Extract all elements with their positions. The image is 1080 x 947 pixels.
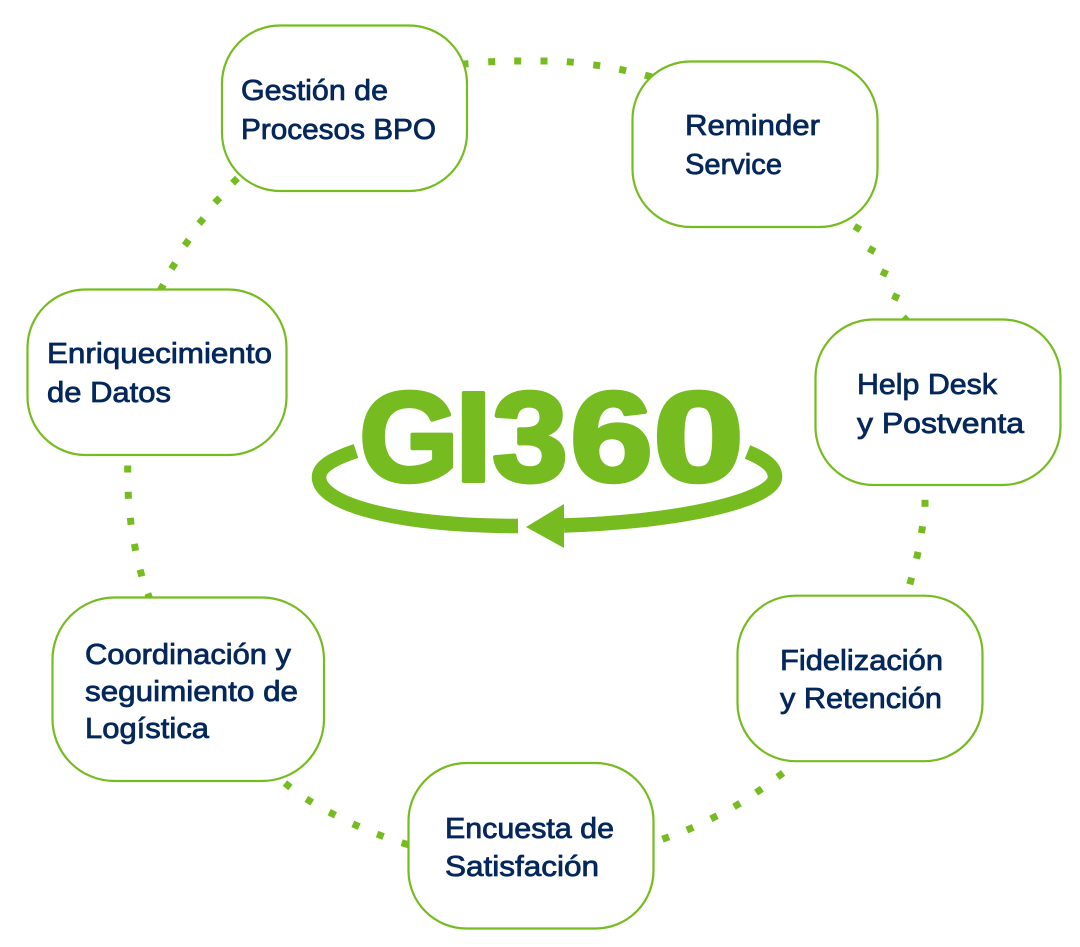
panel: Encuesta de Satisfación: Encuesta de [445, 813, 614, 845]
panel: Coordinación y seguimiento de Logística: seguimiento de [85, 676, 298, 708]
panel: Enriquecimiento de Datos: de Datos [47, 377, 171, 409]
panel: Encuesta de Satisfación [408, 763, 654, 928]
logo wordmark: 6 [570, 366, 653, 509]
logo wordmark: I [455, 366, 492, 509]
panel: Help Desk y Postventa [816, 320, 1060, 485]
logo wordmark: 0 [653, 366, 744, 509]
panel: Gestión de Procesos BPO [222, 26, 467, 191]
panel: Reminder Service: Service [685, 149, 782, 181]
dotted connector: Coordinación to Enriquecimiento [124, 466, 153, 601]
panel: Reminder Service: Reminder [685, 110, 820, 142]
panel: Gestión de Procesos BPO: Procesos BPO [241, 114, 436, 146]
panel: Gestión de Procesos BPO: Gestión de [241, 75, 388, 107]
dotted connector: Encuesta to Coordinación [283, 780, 409, 848]
dotted connector: Help Desk to Fidelización [906, 500, 928, 585]
panel: Coordinación y seguimiento de Logística [52, 598, 324, 781]
dotted connector: Enriquecimiento to Gestión [157, 176, 240, 292]
logo wordmark [359, 366, 744, 509]
panel: Encuesta de Satisfación: Satisfación [445, 851, 599, 883]
logo wordmark: G [359, 366, 459, 509]
logo: GI360 with circular arrow [319, 366, 775, 548]
panel: Fidelización y Retención [738, 596, 982, 761]
logo wordmark: 3 [492, 366, 568, 509]
panel: Enriquecimiento de Datos: Enriquecimiento [47, 338, 272, 370]
panel: Fidelización y Retención: y Retención [780, 683, 942, 715]
arrow: circular swoosh around logo [319, 451, 775, 548]
panel: Help Desk y Postventa: y Postventa [857, 408, 1025, 440]
dotted connector: Gestión to Reminder [461, 58, 653, 80]
dotted connector: Reminder to Help Desk [853, 223, 911, 324]
panel: Coordinación y seguimiento de Logística: Coordinación y [85, 639, 292, 671]
panel: Enriquecimiento de Datos [28, 290, 286, 455]
panel: Coordinación y seguimiento de Logística: Logística [85, 713, 210, 745]
panel: Reminder Service [632, 62, 878, 227]
panel: Help Desk y Postventa: Help Desk [857, 369, 998, 401]
panel: Fidelización y Retención: Fidelización [780, 645, 943, 677]
dotted connector: Fidelización to Encuesta [661, 770, 785, 842]
